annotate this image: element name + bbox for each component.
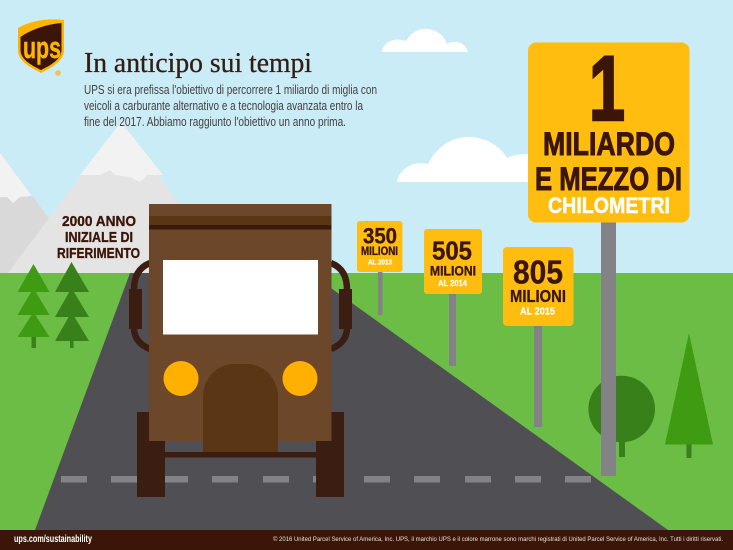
truck [129, 204, 352, 497]
mountain: left [0, 100, 90, 273]
sign: 805 million: MILIONI [510, 286, 566, 306]
truck wheels and axle [137, 412, 344, 497]
truck headlights [164, 361, 318, 396]
truck windshield [163, 260, 318, 334]
road [35, 273, 668, 530]
intro paragraph: fine del 2017. Abbiamo raggiunto l'obiettivo un anno prima. [84, 115, 346, 129]
sign: 805 million: AL 2015 [520, 306, 555, 318]
sign: 1.5 billion km: E MEZZO DI [535, 161, 682, 197]
tree: right cone [665, 333, 713, 458]
tree: left pine dark [55, 262, 89, 348]
tree: left pine light [18, 264, 50, 348]
intro paragraph: UPS si era prefissa l'obiettivo di percorrere 1 miliardo di miglia con [84, 83, 377, 97]
grass [0, 273, 733, 530]
truck grille [203, 364, 278, 452]
label: baseline year: 2000 ANNO [62, 213, 136, 230]
truck mirrors [129, 263, 352, 349]
sign: 350 million [357, 221, 402, 315]
logo: UPS shield [18, 19, 64, 76]
sign: 505 million [424, 229, 482, 366]
sign: 805 million: 805 [513, 254, 563, 290]
sign: 505 million: AL 2014 [438, 278, 467, 288]
cloud: upper [382, 29, 468, 52]
cloud: lower [397, 137, 530, 182]
intro paragraph [84, 83, 377, 129]
intro paragraph: veicoli a carburante alternativo e a tecnologia avanzata entro la [84, 99, 363, 113]
mountains [0, 100, 230, 273]
sign: 505 million: MILIONI [430, 262, 476, 278]
sign: 350 million: 350 [363, 224, 397, 248]
footer bar [0, 530, 733, 550]
sign: 805 million [503, 247, 574, 427]
footer url: ups.com/sustainability [14, 534, 92, 545]
label: baseline year: RIFERIMENTO [57, 245, 140, 262]
sign: 1.5 billion km: 1 [589, 38, 625, 140]
road centre dashes [61, 476, 591, 482]
sign: 1.5 billion km: MILIARDO [543, 126, 675, 162]
label: baseline year [57, 213, 140, 262]
sign: 350 million: MILIONI [361, 246, 398, 258]
truck body [149, 204, 332, 441]
sign: 350 million: AL 2013 [368, 260, 392, 266]
sign: 505 million: 505 [432, 236, 472, 266]
label: baseline year: INIZIALE DI [65, 229, 133, 246]
logo: UPS shield: ups [23, 30, 61, 65]
mountain: centre [8, 122, 230, 273]
tree: right round [588, 376, 655, 457]
sign: 1.5 billion km [528, 38, 690, 476]
truck roof stripes [149, 216, 332, 230]
title: In anticipo sui tempi [84, 47, 312, 79]
sign: 1.5 billion km: CHILOMETRI [548, 193, 670, 218]
